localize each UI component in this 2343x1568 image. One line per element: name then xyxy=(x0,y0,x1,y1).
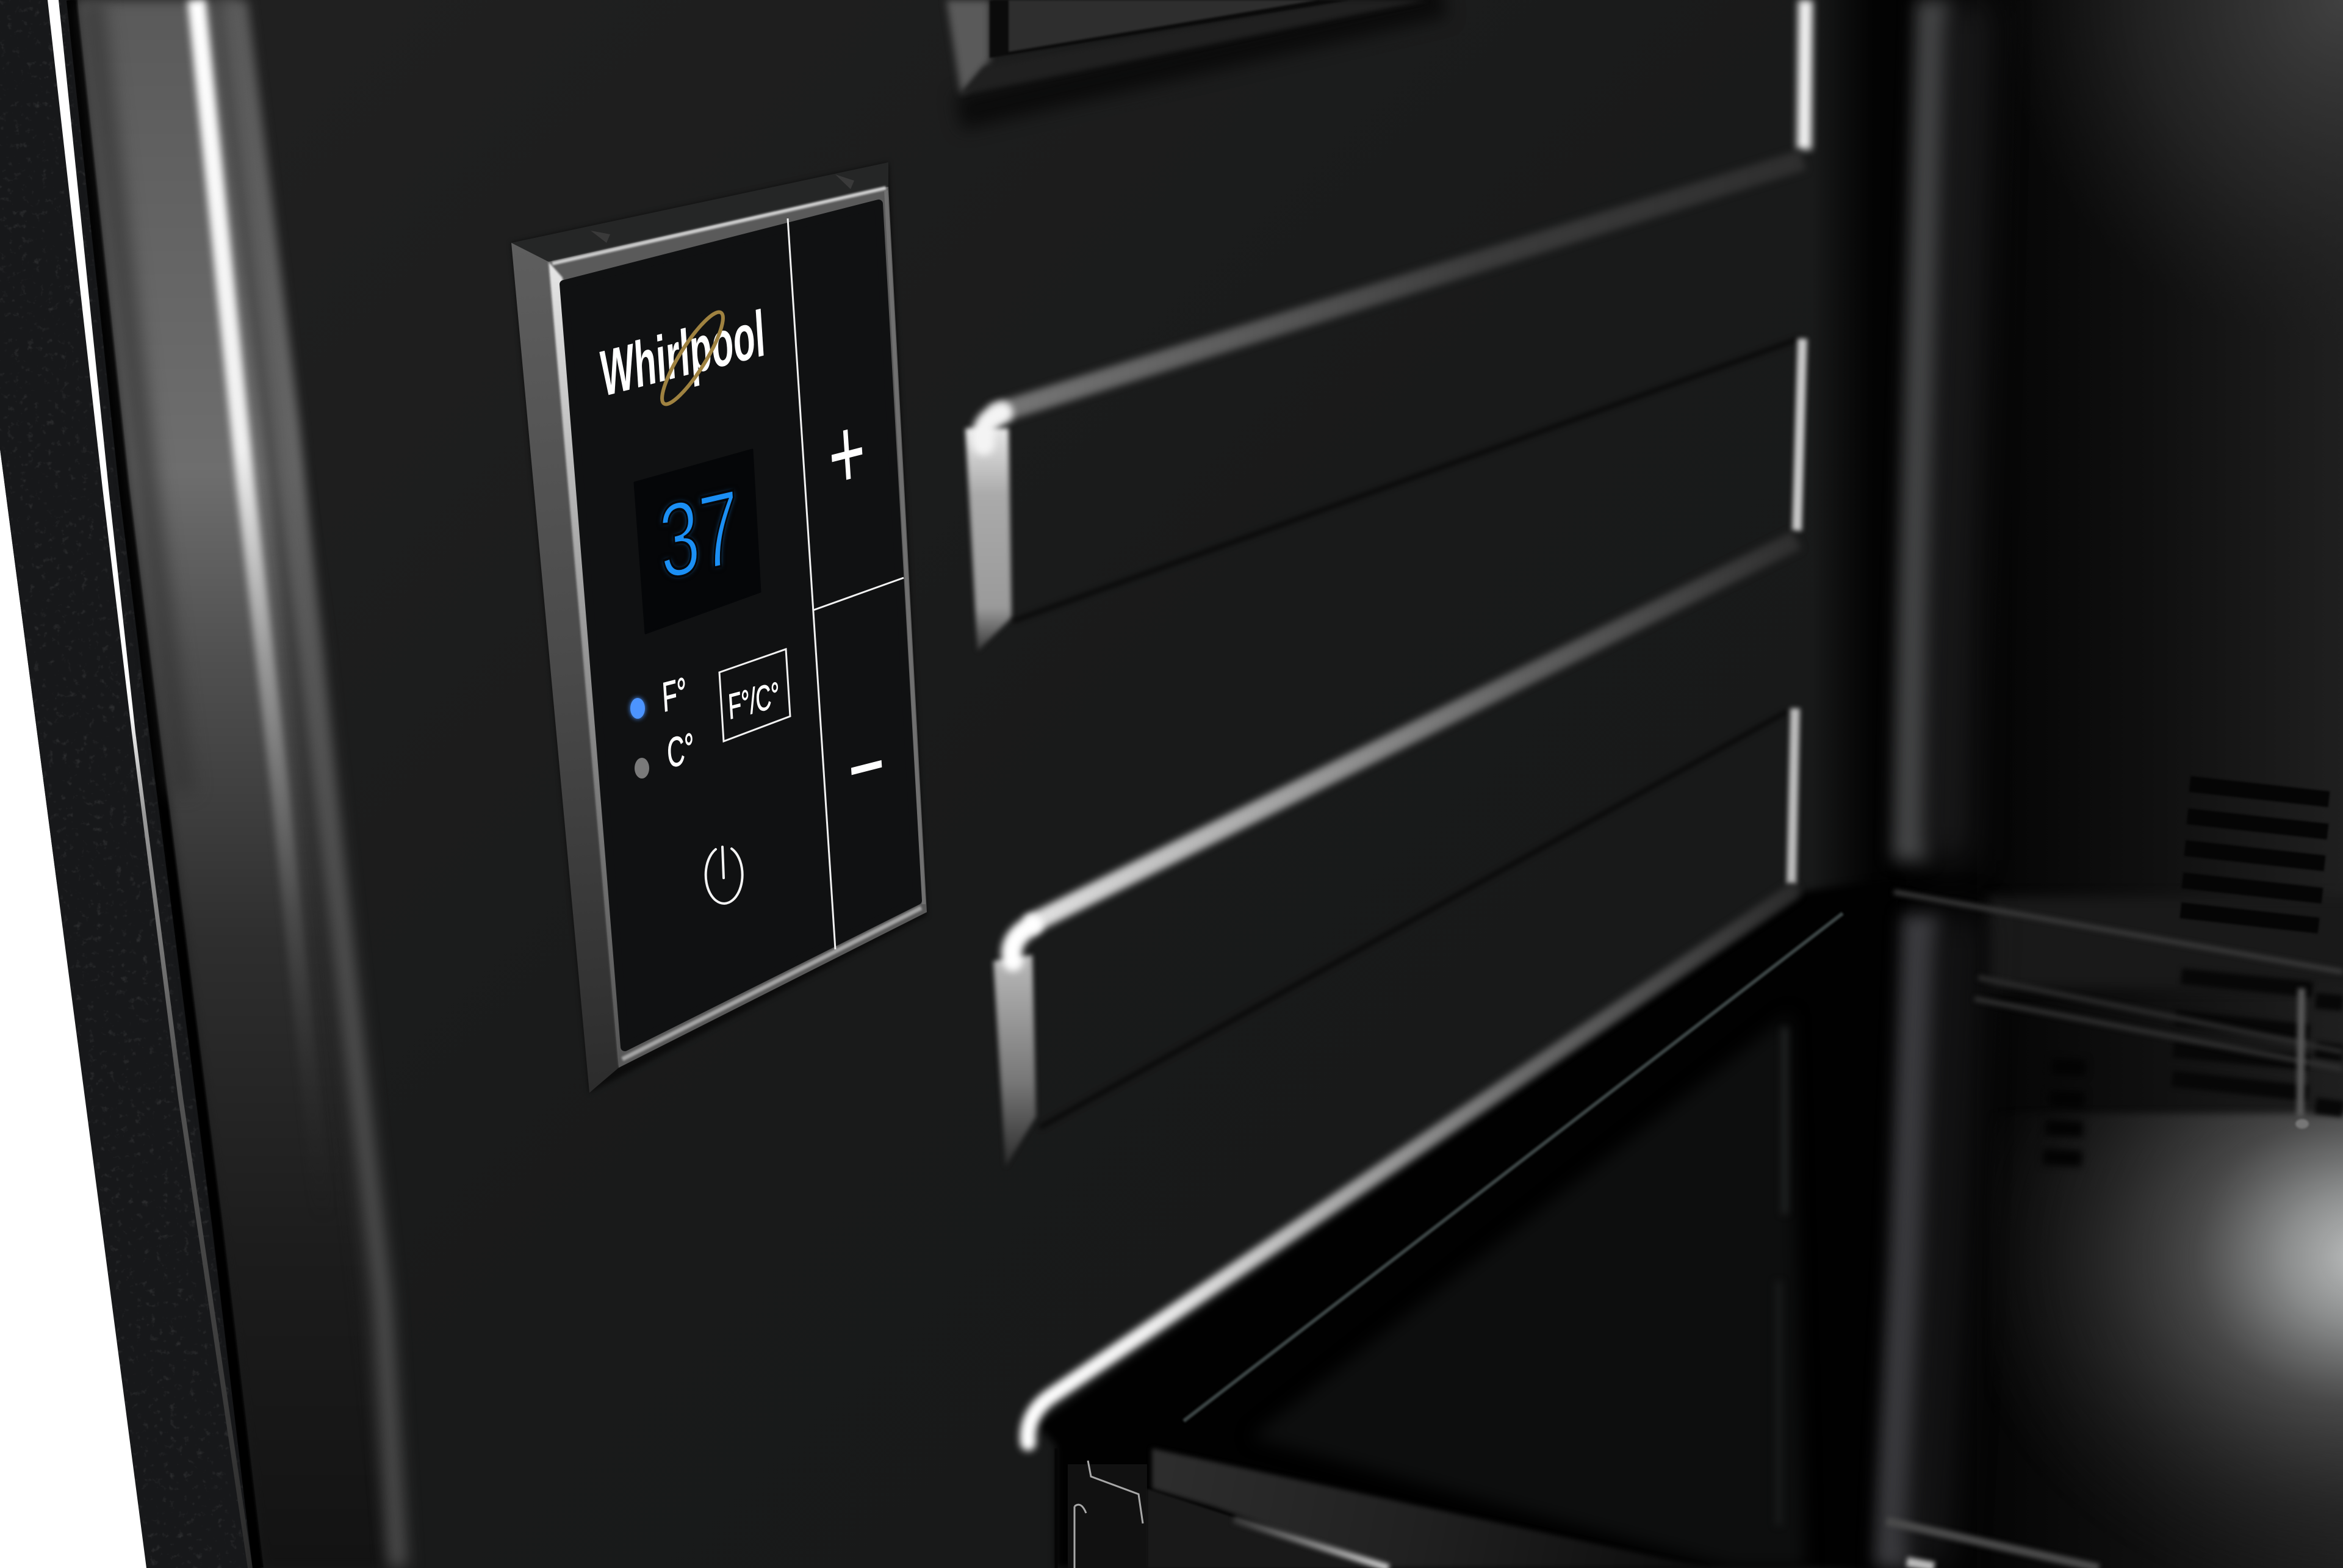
panel: drawer opening xyxy=(1037,879,1898,1568)
vent: reflected slots xyxy=(2172,976,2343,1109)
drawer front rail xyxy=(1147,1448,1708,1568)
panel: control panel bezel and touch plate xyxy=(511,162,927,1093)
button: minus: − xyxy=(844,706,888,827)
panel: first embossed shelf rib xyxy=(965,0,1805,651)
panel: top embossed frame xyxy=(946,0,1444,113)
icon: power button xyxy=(706,847,743,904)
shelf rail highlight xyxy=(1028,892,1843,1443)
vent: upper slots xyxy=(2181,784,2329,926)
indicator: Celsius: C° xyxy=(666,724,696,777)
display: temperature readout: 37 xyxy=(656,467,743,602)
panel: left door edge and white backdrop xyxy=(0,0,262,1568)
button: plus: + xyxy=(825,393,869,514)
control plate dividers xyxy=(788,218,904,949)
hinge bracket xyxy=(1056,1448,1143,1568)
button: unit toggle: F°/C° xyxy=(727,675,781,727)
indicator: Fahrenheit: F° xyxy=(661,668,688,721)
panel: dark recess right of liner xyxy=(1806,0,2001,1568)
glass shelf reflection lines xyxy=(1887,892,2343,1568)
button: unit toggle xyxy=(719,649,790,741)
logo: Whirlpool wordmark with gold ring: Whirlpool xyxy=(599,297,767,411)
panel: stainless door gasket band xyxy=(72,0,408,1568)
vent: small rear slots xyxy=(2043,1066,2086,1159)
indicator: Celsius xyxy=(635,724,696,779)
display: temperature readout xyxy=(635,450,760,633)
panel: third rib right edge xyxy=(1791,708,1795,884)
panel: second embossed shelf rib xyxy=(993,339,1802,1167)
panel: interior vertical post xyxy=(1894,0,1968,1568)
indicator: Fahrenheit xyxy=(630,668,688,721)
panel: interior right wall xyxy=(1977,0,2343,1568)
